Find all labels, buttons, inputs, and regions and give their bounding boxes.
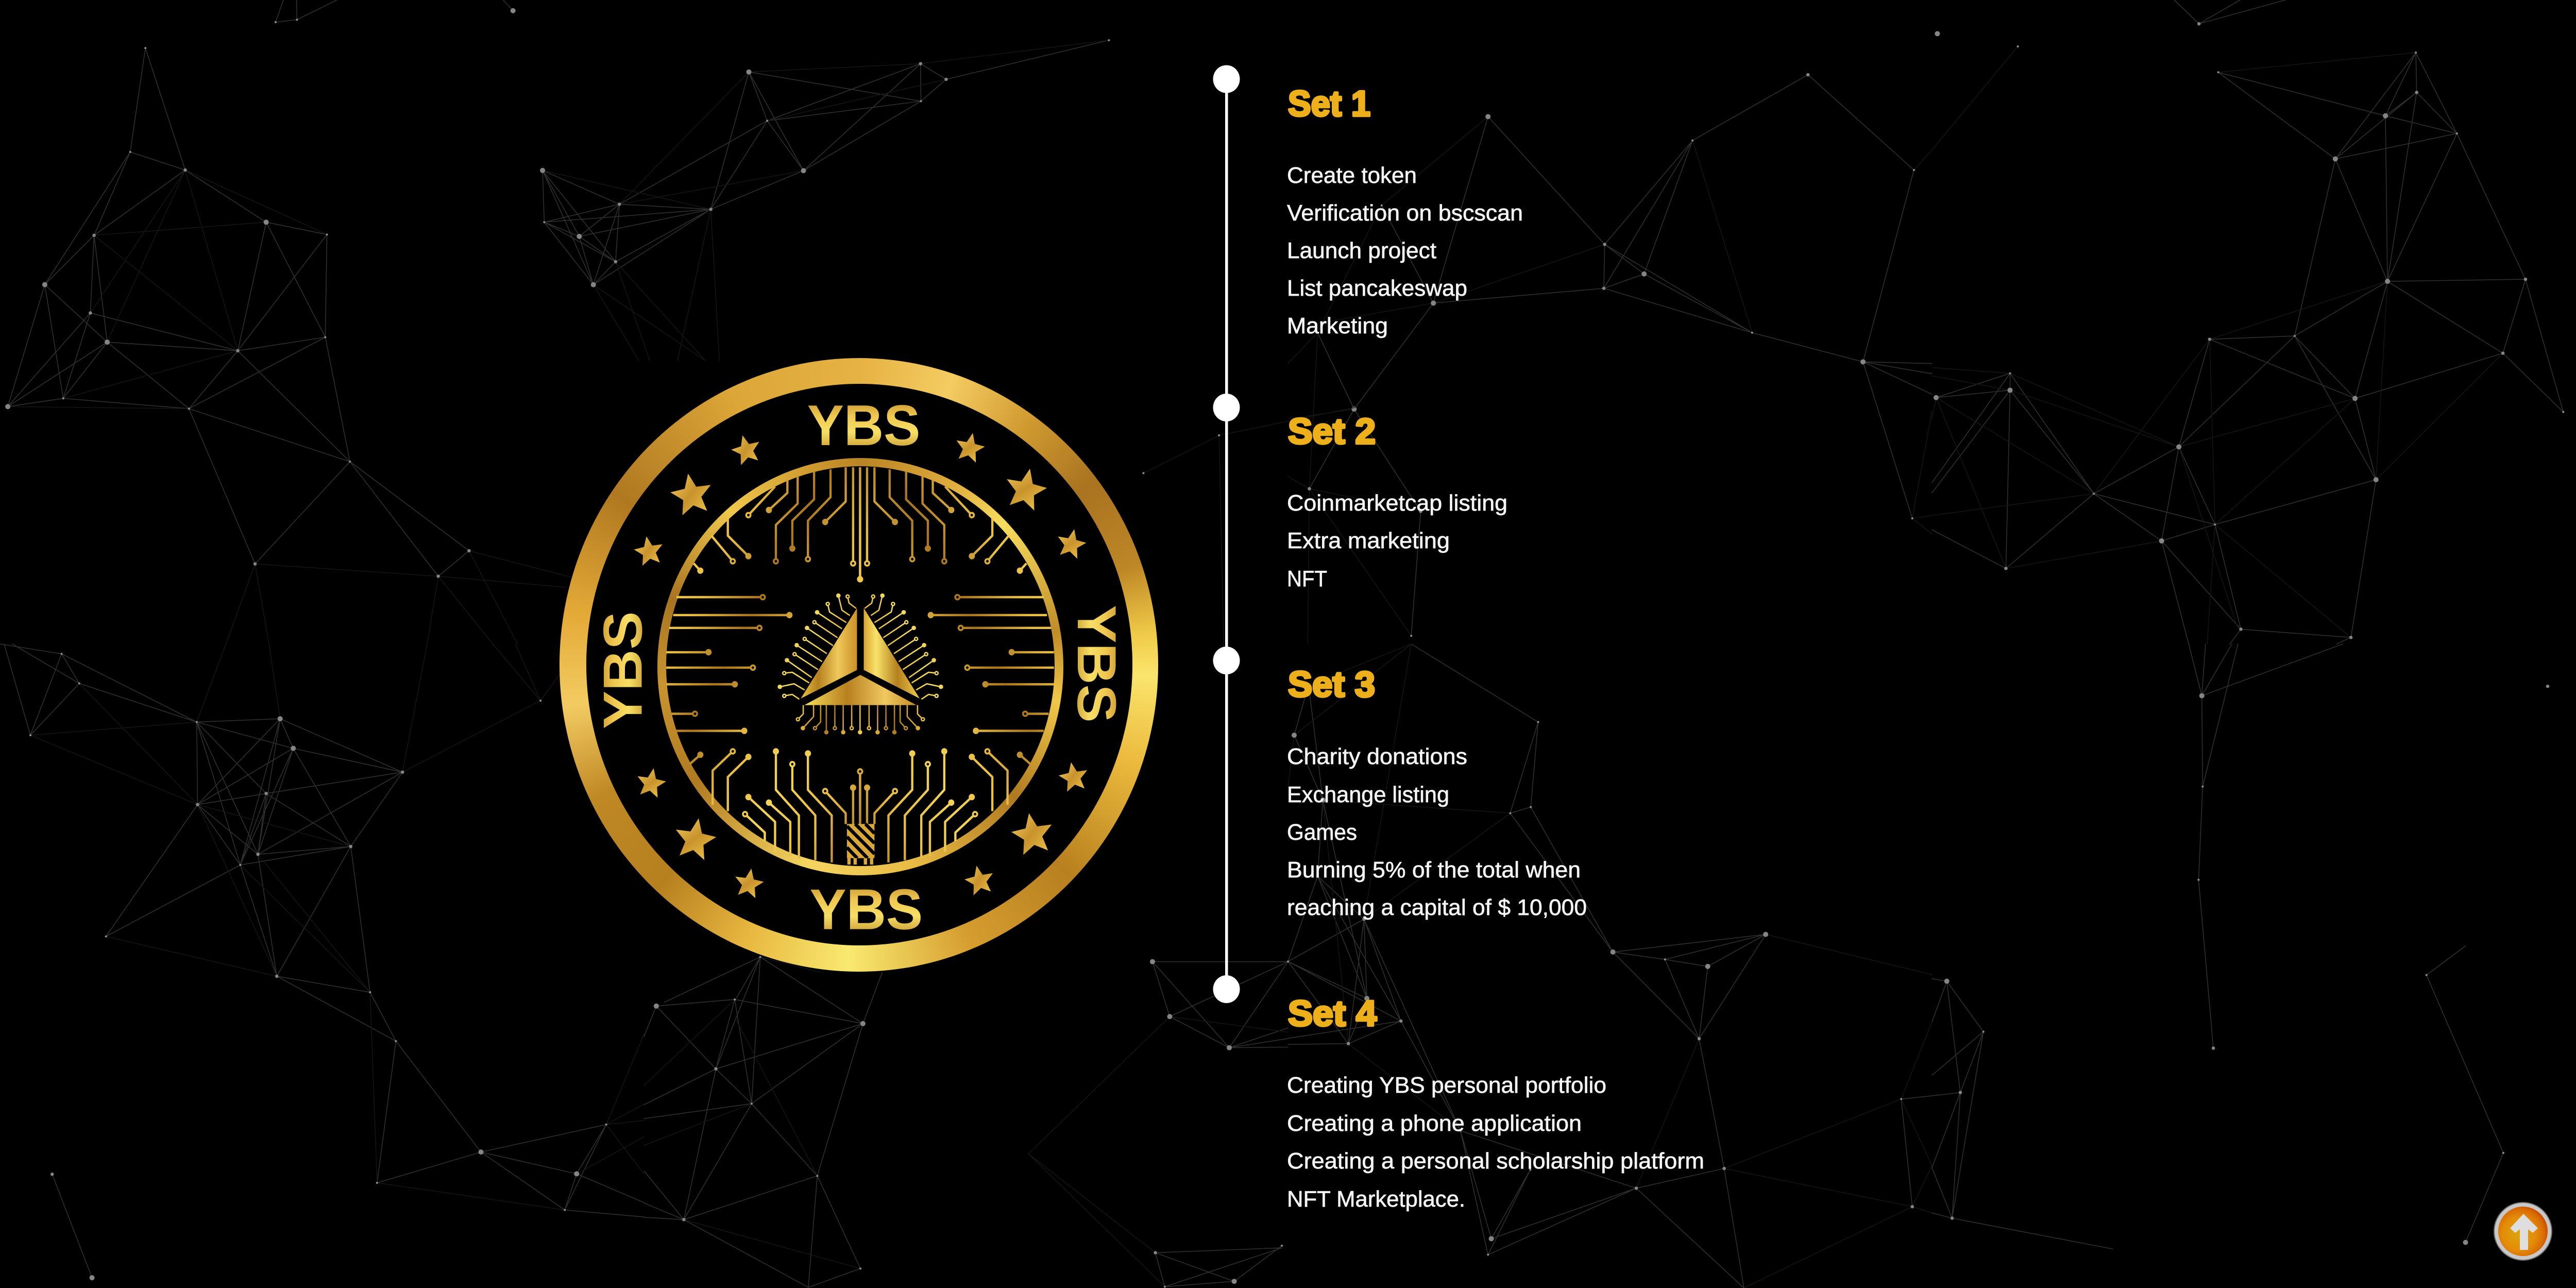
list: Set 3 items: Charity donations [1287, 744, 1467, 769]
list: Set 3 items: reaching a capital of $ 10,000 [1287, 895, 1587, 920]
list: Set 4 items: Creating YBS personal portfolio [1287, 1073, 1606, 1098]
list: Set 3 items: Games [1287, 820, 1357, 845]
list: Set 2 items: Coinmarketcap listing [1287, 490, 1507, 516]
list: Set 1 items: Verification on bscscan [1287, 200, 1523, 226]
hatched connector block [847, 824, 874, 865]
YBS lettering around the rim: YBS [807, 394, 920, 457]
medallion details: text, stars, circuit [592, 394, 1127, 942]
heading: Set 4: Set 4 [1288, 993, 1377, 1033]
list: Set 3 items [1287, 744, 1587, 920]
list: Set 4 items: Creating a personal scholarship platform [1287, 1148, 1704, 1174]
list: Set 4 items: NFT Marketplace. [1287, 1187, 1465, 1212]
list: Set 4 items: Creating a phone application [1287, 1111, 1582, 1136]
heading: Set 2: Set 2 [1288, 411, 1376, 451]
list: Set 1 items [1287, 163, 1523, 338]
list: Set 1 items: Marketing [1287, 313, 1388, 338]
list: Set 2 items: NFT [1287, 566, 1327, 591]
panel: Set 2 [1287, 411, 1507, 591]
list: Set 2 items [1287, 490, 1507, 591]
outer gold ring [560, 358, 1158, 972]
icon: back-to-top arrow button [2494, 1202, 2552, 1261]
list: Set 3 items: Exchange listing [1287, 782, 1449, 807]
heading: Set 1: Set 1 [1288, 83, 1370, 124]
list: Set 3 items: Burning 5% of the total when [1287, 857, 1581, 883]
central triangle emblem with circuit pins [780, 596, 941, 732]
list: Set 1 items: Launch project [1287, 238, 1436, 263]
YBS lettering around the rim: YBS [810, 877, 923, 942]
panel: Set 1 [1287, 83, 1523, 338]
inner gold ring [657, 458, 1063, 875]
YBS lettering around the rim: YBS [592, 612, 654, 729]
list: Set 1 items: Create token [1287, 163, 1417, 188]
list: Set 1 items: List pancakeswap [1287, 276, 1467, 301]
stars around the rim [632, 430, 1090, 899]
list: Set 4 items [1287, 1073, 1704, 1212]
YBS lettering around the rim [592, 394, 1127, 942]
logo: gold YBS coin medallion [560, 358, 1158, 972]
panel: Set 4 [1287, 993, 1704, 1212]
panel: Set 3 [1287, 664, 1587, 920]
circuit traces [666, 467, 1054, 862]
YBS lettering around the rim: YBS [1065, 605, 1127, 723]
list: Set 2 items: Extra marketing [1287, 528, 1450, 553]
heading: Set 3: Set 3 [1288, 664, 1375, 704]
